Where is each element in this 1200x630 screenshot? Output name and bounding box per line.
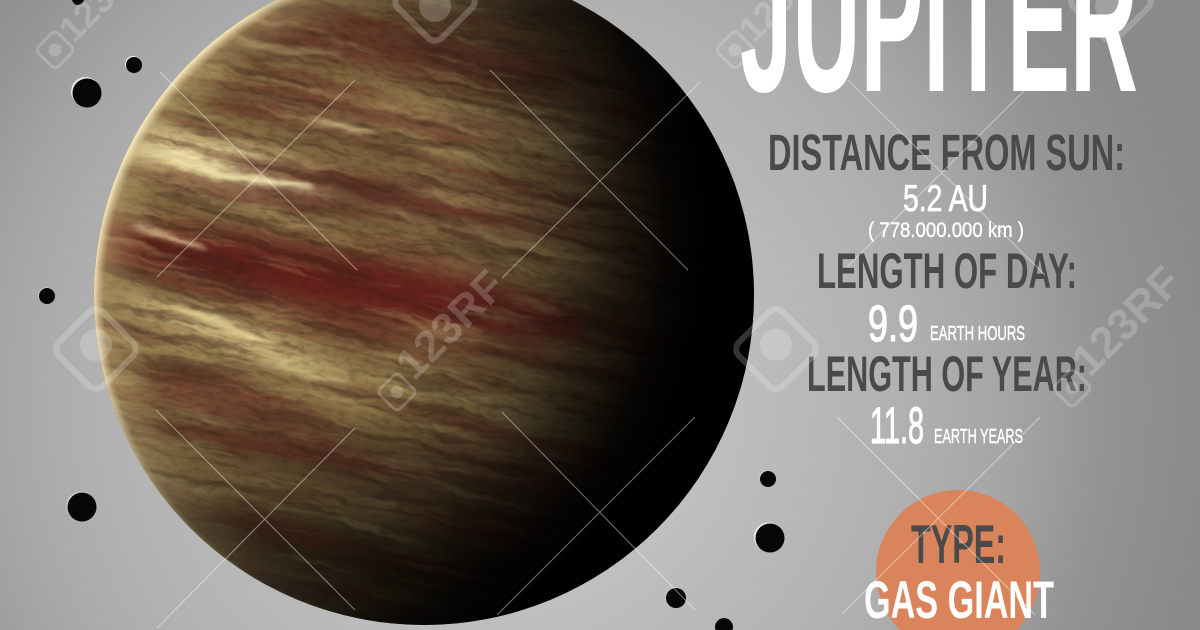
watermark: 123RF [386, 261, 514, 389]
distance value: 5.2 AU [903, 178, 988, 219]
year unit: EARTH YEARS [934, 426, 1023, 448]
stats block [768, 124, 1125, 454]
watermark: 123RF [1062, 257, 1190, 385]
day value: 9.9 [868, 295, 918, 352]
moons [38, 0, 784, 630]
type label: TYPE: [911, 513, 1006, 575]
planet: Jupiter [79, 0, 754, 625]
day unit: EARTH HOURS [930, 323, 1025, 345]
year value: 11.8 [870, 397, 924, 454]
type value: GAS GIANT [864, 571, 1054, 630]
type badge circle [876, 490, 1040, 630]
distance in km: ( 778.000.000 km ) [868, 219, 1024, 242]
